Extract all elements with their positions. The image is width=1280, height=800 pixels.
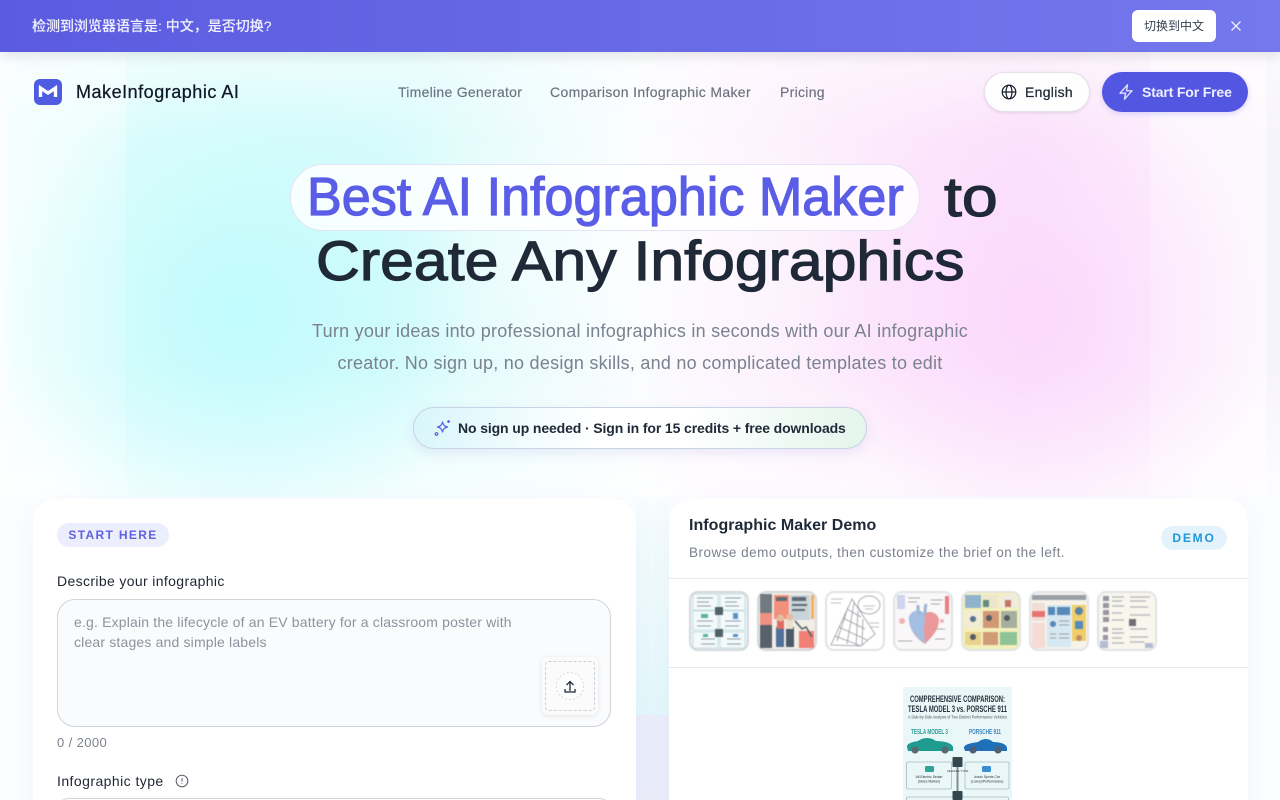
hero subtitle	[312, 321, 968, 373]
demo preview infographic	[903, 687, 1012, 800]
icon: upload	[545, 661, 595, 711]
language selector	[984, 72, 1090, 112]
demo tag: DEMO	[1172, 531, 1216, 545]
divider	[669, 578, 1248, 579]
car: teal	[907, 738, 953, 751]
thumbnail 2	[756, 590, 818, 652]
icon: info	[176, 774, 188, 788]
switch language button	[1132, 10, 1216, 42]
demo preview infographic: (Mass Market)	[918, 780, 940, 784]
demo description: Browse demo outputs, then customize the brief on the left.	[689, 545, 1065, 560]
hero heading	[290, 164, 998, 292]
nav link: comparison: Comparison Infographic Maker	[550, 84, 751, 100]
banner message: 检测到浏览器语言是: 中文，是否切换?	[32, 18, 272, 34]
icon: lightning	[1119, 84, 1133, 100]
demo preview infographic: Iconic Sports Car	[974, 775, 1001, 779]
field label: describe: Describe your infographic	[57, 573, 225, 589]
thumbnail strip	[688, 590, 1158, 652]
start here tag	[57, 523, 169, 547]
thumbnail 4	[892, 590, 954, 652]
prompt textarea	[57, 599, 611, 727]
placeholder text: clear stages and simple labels	[74, 634, 267, 650]
title line one highlight: Best AI Infographic Maker	[307, 167, 904, 227]
no sign up badge	[413, 407, 867, 449]
hero subtitle: Turn your ideas into professional infographics in seconds with our AI infographic	[312, 321, 968, 341]
language label: English	[1025, 84, 1073, 100]
nav link: pricing: Pricing	[780, 84, 825, 100]
badge text: No sign up needed · Sign in for 15 credits + free downloads	[458, 420, 846, 436]
placeholder text	[74, 614, 512, 650]
type select	[57, 798, 611, 800]
thumbnail 3	[824, 590, 886, 652]
demo preview infographic: VEHICLE TYPE	[947, 769, 968, 773]
demo preview infographic: (Luxury/Performance)	[971, 780, 1003, 784]
language banner	[0, 0, 1280, 52]
title word: to: to	[944, 165, 998, 228]
panel: demo	[669, 499, 1248, 800]
nav link: timeline: Timeline Generator	[398, 84, 522, 100]
thumbnail 7	[1096, 590, 1158, 652]
icon: logo	[34, 79, 62, 105]
comparison boxes	[906, 762, 1009, 800]
title line two: Create Any Infographics	[316, 229, 964, 292]
thumbnail 6	[1028, 590, 1090, 652]
field label: type: Infographic type	[57, 773, 164, 789]
character counter: 0 / 2000	[57, 735, 107, 750]
demo tag	[1161, 526, 1227, 550]
thumbnail 5	[960, 590, 1022, 652]
start for free button	[1102, 72, 1248, 112]
demo title: Infographic Maker Demo	[689, 517, 876, 534]
button label: Start For Free	[1142, 84, 1232, 100]
demo preview infographic: TESLA MODEL 3	[911, 727, 948, 736]
icon: close	[1231, 21, 1241, 31]
icon: sparkles	[434, 420, 450, 436]
thumbnail 1	[688, 590, 750, 652]
start here tag: START HERE	[68, 528, 158, 542]
panel: form	[33, 499, 636, 800]
icon: globe	[1002, 84, 1016, 100]
upload button	[542, 657, 598, 715]
switch language button: 切换到中文	[1144, 19, 1204, 33]
brand name: MakeInfographic AI	[76, 82, 239, 102]
demo preview infographic: All-Electric Sedan	[916, 775, 942, 779]
highlighted title pill	[290, 164, 920, 231]
divider	[669, 667, 1248, 668]
hero subtitle: creator. No sign up, no design skills, and no complicated templates to edit	[337, 353, 943, 373]
car: blue	[964, 739, 1007, 751]
gap strip lower	[636, 715, 669, 800]
navigation bar	[34, 72, 1250, 116]
gap strip between panels	[636, 497, 669, 715]
placeholder text: e.g. Explain the lifecycle of an EV battery for a classroom poster with	[74, 614, 512, 630]
